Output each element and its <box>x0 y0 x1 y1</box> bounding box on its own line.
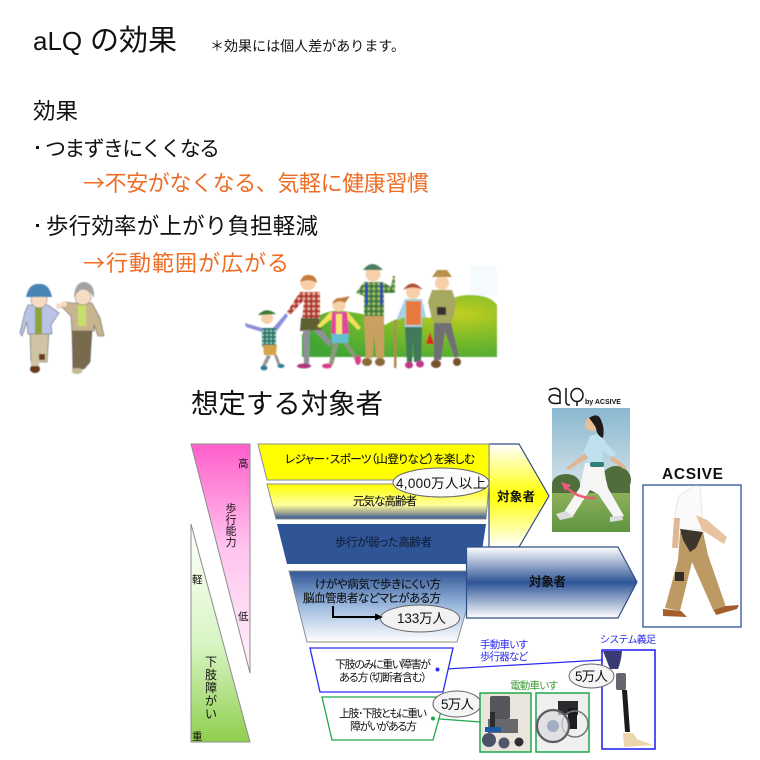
label: high: 高 <box>238 457 248 470</box>
man with trekking pole <box>356 264 396 368</box>
callout: 50 thousand right <box>569 664 614 688</box>
band: weak walkers: 歩行が弱った高齢者 <box>335 535 432 549</box>
arrow: target users navy <box>466 547 637 618</box>
pale sky <box>470 266 497 296</box>
photo: woman walking with aLQ <box>552 408 631 532</box>
label: lower-limb disability: が <box>205 693 217 708</box>
arrow: target users yellow: 対象者 <box>497 489 535 504</box>
callout: 40 million or more: 4,000万人以上 <box>396 476 486 491</box>
arrow: target users navy: 対象者 <box>529 574 566 589</box>
callout: 1.33 million: 133万人 <box>397 611 446 626</box>
girl in pink vest <box>317 296 361 368</box>
label: mild: 軽 <box>192 574 203 586</box>
label: electric wheelchair: 電動車いす <box>510 679 558 692</box>
callout: 50 thousand left: 5万人 <box>441 697 474 712</box>
arrow: target users yellow <box>489 444 549 547</box>
triangle: walking ability <box>191 444 250 673</box>
band: leisure and sports: レジャー･スポーツ（山登りなど）を楽しむ <box>285 452 475 466</box>
photo: electric wheelchair <box>480 693 531 752</box>
band: leisure and sports <box>258 444 489 480</box>
panel: upper and lower limb disability: 上肢･下肢ともに重い <box>339 706 427 720</box>
photo: man wearing ACSIVE <box>643 485 741 627</box>
girl with pigtails <box>287 275 332 368</box>
effect 2: 歩行効率が上がり負担軽減 <box>46 214 318 239</box>
line: amputee group to prosthesis <box>438 660 602 670</box>
panel: lower-limb severe disability <box>310 648 453 692</box>
label: manual wheelchair and walkers: 手動車いす <box>480 638 528 651</box>
label: lower-limb disability: 障 <box>205 681 217 695</box>
label: walking ability: 力 <box>226 536 236 549</box>
older man with binoculars <box>428 270 461 368</box>
label: lower-limb disability: 肢 <box>205 667 217 682</box>
child <box>245 310 288 370</box>
title: の効果 <box>90 25 177 57</box>
band: healthy seniors: 元気な高齢者 <box>353 494 417 508</box>
heading: effects: 効果 <box>33 99 78 124</box>
brand: ACSIVE: ACSIVE <box>662 466 723 483</box>
green hills <box>302 295 497 357</box>
title: aLQ <box>33 26 82 56</box>
effect 1: つまずきにくくなる <box>45 138 220 161</box>
band: weak walkers <box>277 524 486 564</box>
label: manual wheelchair and walkers <box>480 638 529 663</box>
line: both limbs group to wheelchair <box>433 718 481 722</box>
callout: 40 million or more <box>393 468 489 497</box>
panel: upper and lower limb disability: 障がいがある方 <box>350 719 417 733</box>
band: injury or illness: けがや病気で歩きにくい方 <box>315 577 441 591</box>
label: walking ability: 行 <box>226 513 236 526</box>
label: prosthetic system: システム義足 <box>600 633 656 646</box>
effect 2 result: →行動範囲が広がる <box>83 246 289 278</box>
panel: lower-limb severe disability: ある方（切断者含む） <box>339 670 427 684</box>
panel: upper and lower limb disability <box>322 697 445 740</box>
label: walking ability: 能 <box>226 524 236 538</box>
effect 1 result: →不安がなくなる、気軽に健康習慣 <box>83 166 429 198</box>
callout: 1.33 million <box>375 605 460 632</box>
band: injury or illness: 脳血管患者などマヒがある方 <box>303 591 441 605</box>
logo: aLQ by ACSIVE <box>549 388 621 406</box>
elbow arrow to 1.33 million <box>333 606 383 617</box>
label: manual wheelchair and walkers: 歩行器など <box>480 650 529 663</box>
photo: lightweight wheelchair <box>536 693 589 752</box>
label: walking ability: 歩 <box>226 501 236 515</box>
note: individual differences: ＊効果には個人差があります。 <box>210 38 405 54</box>
logo: aLQ by ACSIVE: by ACSIVE <box>585 399 621 406</box>
callout: 50 thousand right: 5万人 <box>575 669 608 684</box>
label: lower-limb disability: 下 <box>205 655 217 669</box>
band: injury or illness <box>289 571 478 642</box>
title <box>33 25 177 57</box>
label: severe: 重 <box>192 730 202 743</box>
label: lower-limb disability: い <box>205 707 217 721</box>
woman in orange vest <box>397 284 426 368</box>
illustration: hiking family on green hills <box>245 264 497 370</box>
callout: 50 thousand left <box>433 691 481 717</box>
photo: prosthetic leg <box>602 650 655 749</box>
panel: lower-limb severe disability: 下肢のみに重い障害が <box>335 657 431 671</box>
triangle: lower-limb disability <box>191 524 250 743</box>
section heading: target users: 想定する対象者 <box>191 388 383 419</box>
illustration: senior couple walking <box>20 282 104 374</box>
band: healthy seniors <box>267 484 489 519</box>
label: low: 低 <box>238 611 249 623</box>
